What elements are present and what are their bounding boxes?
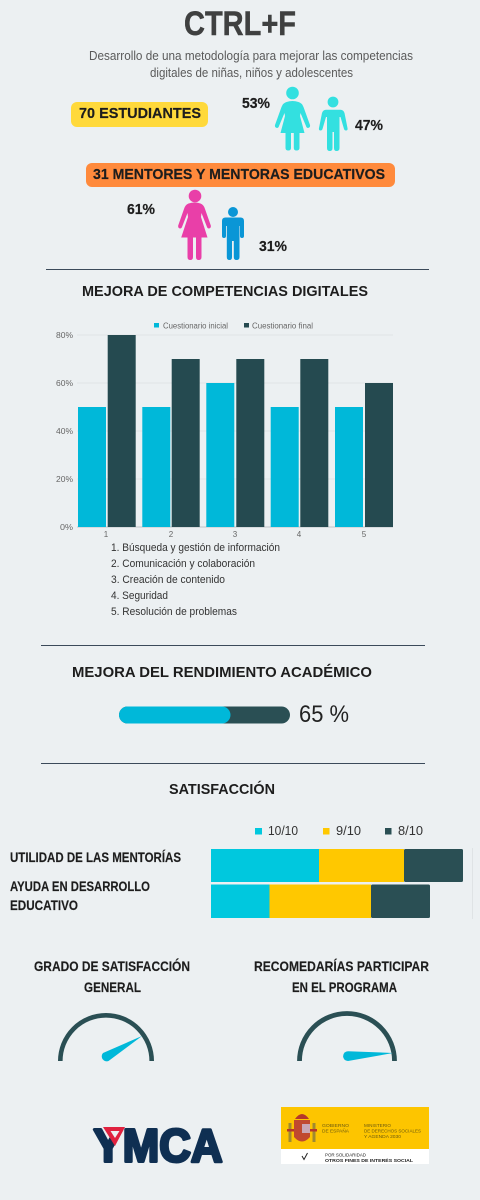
heading: grado de satisfacción: GENERAL: [84, 980, 141, 995]
y axis labels: 80%: [56, 331, 73, 340]
stacked chart legend: [255, 824, 423, 838]
stacked bar chart: satisfaction: [10, 848, 472, 919]
logo: YMCA: YMCA: [94, 1120, 222, 1172]
icon: blue man: [222, 207, 244, 260]
gauge: right: [300, 1014, 394, 1061]
category list: 1. Búsqueda y gestión de información: [111, 542, 280, 554]
icon: cyan woman: [275, 87, 310, 150]
row: ayuda en desarrollo educativo: AYUDA EN DESARROLLO: [10, 879, 150, 894]
x axis labels: 2: [169, 530, 174, 539]
row: utilidad de las mentorías: UTILIDAD DE LAS MENTORÍAS: [10, 850, 181, 865]
category list: 3. Creación de contenido: [111, 574, 225, 586]
panel: recommend: [254, 959, 429, 1061]
chart legend: Cuestionario final: [252, 322, 313, 330]
badge: 70 estudiantes: 70 ESTUDIANTES: [79, 105, 201, 122]
heading: satisfaction: SATISFACCIÓN: [169, 780, 275, 798]
y axis labels: 40%: [56, 427, 73, 436]
x axis labels: 5: [362, 530, 367, 539]
x axis labels: 3: [233, 530, 238, 539]
progress bar: 65%: 65 %: [299, 701, 349, 728]
stat: 47%: 47%: [355, 118, 383, 134]
subtitle: [89, 49, 413, 80]
y axis labels: 20%: [56, 475, 73, 484]
x axis labels: 4: [297, 530, 302, 539]
y axis labels: [56, 331, 73, 532]
subtitle: Desarrollo de una metodología para mejorar las competencias: [89, 49, 413, 63]
stacked chart legend: 10/10: [268, 824, 298, 838]
row: utilidad de las mentorías: [10, 849, 463, 882]
ministry text: [322, 1123, 421, 1140]
panel: overall satisfaction: [34, 959, 190, 1061]
heading: grado de satisfacción: [34, 959, 190, 995]
heading: recomendarías: EN EL PROGRAMA: [292, 980, 397, 995]
chart legend: Cuestionario inicial: [163, 322, 228, 330]
category list: 5. Resolución de problemas: [111, 606, 237, 618]
heading: recomendarías: RECOMEDARÍAS PARTICIPAR: [254, 959, 429, 974]
heading: grado de satisfacción: GRADO DE SATISFACCIÓN: [34, 959, 190, 974]
badge: 31 mentores: [86, 163, 395, 187]
ministry text: GOBIERNO: [322, 1123, 349, 1129]
row: ayuda en desarrollo educativo: EDUCATIVO: [10, 898, 78, 913]
stacked chart legend: 9/10: [336, 824, 361, 838]
chart legend: [154, 322, 313, 330]
category list: 2. Comunicación y colaboración: [111, 558, 255, 570]
badge: 31 mentores: 31 MENTORES Y MENTORAS EDUCATIVOS: [93, 166, 385, 183]
panel: students: [71, 87, 383, 151]
bar chart: digital skills: [56, 322, 393, 539]
heading: digital skills: MEJORA DE COMPETENCIAS DIGITALES: [82, 283, 368, 300]
title: CTRL+F: [184, 5, 296, 43]
x axis labels: [104, 530, 367, 539]
solidarity text: POR SOLIDARIDAD: [325, 1152, 367, 1158]
bars: initial questionnaire: [78, 383, 363, 527]
stat: 61%: 61%: [127, 202, 155, 218]
heading: academic performance: MEJORA DEL RENDIMIENTO ACADÉMICO: [72, 664, 372, 681]
category list: [111, 542, 280, 618]
icon: coat of arms: [287, 1114, 317, 1142]
logo: Gobierno de España: [281, 1107, 429, 1164]
y axis labels: 0%: [60, 523, 73, 532]
y axis labels: 60%: [56, 379, 73, 388]
badge: 70 estudiantes: [71, 102, 208, 127]
panel: mentors: [86, 163, 395, 260]
ministry text: DE DERECHOS SOCIALES: [364, 1128, 421, 1134]
x axis labels: 1: [104, 530, 109, 539]
row: ayuda en desarrollo educativo: [10, 879, 430, 918]
solidarity text: OTROS FINES DE INTERÉS SOCIAL: [325, 1156, 413, 1163]
ministry text: DE ESPAÑA: [322, 1128, 350, 1134]
category list: 4. Seguridad: [111, 590, 168, 602]
heading: recomendarías: [254, 959, 429, 995]
ministry text: Y AGENDA 2030: [364, 1134, 401, 1140]
stacked chart legend: 8/10: [398, 824, 423, 838]
progress bar: 65%: [119, 701, 349, 728]
icon: pink woman: [178, 190, 211, 260]
ministry text: MINISTERIO: [364, 1123, 391, 1129]
bars: final questionnaire: [108, 335, 393, 527]
stat: 31%: 31%: [259, 239, 287, 255]
solidarity text: [302, 1152, 413, 1163]
icon: cyan man: [319, 97, 348, 151]
stat: 53%: 53%: [242, 96, 270, 112]
gauge: left: [60, 1015, 152, 1061]
subtitle: digitales de niñas, niños y adolescentes: [150, 66, 353, 80]
